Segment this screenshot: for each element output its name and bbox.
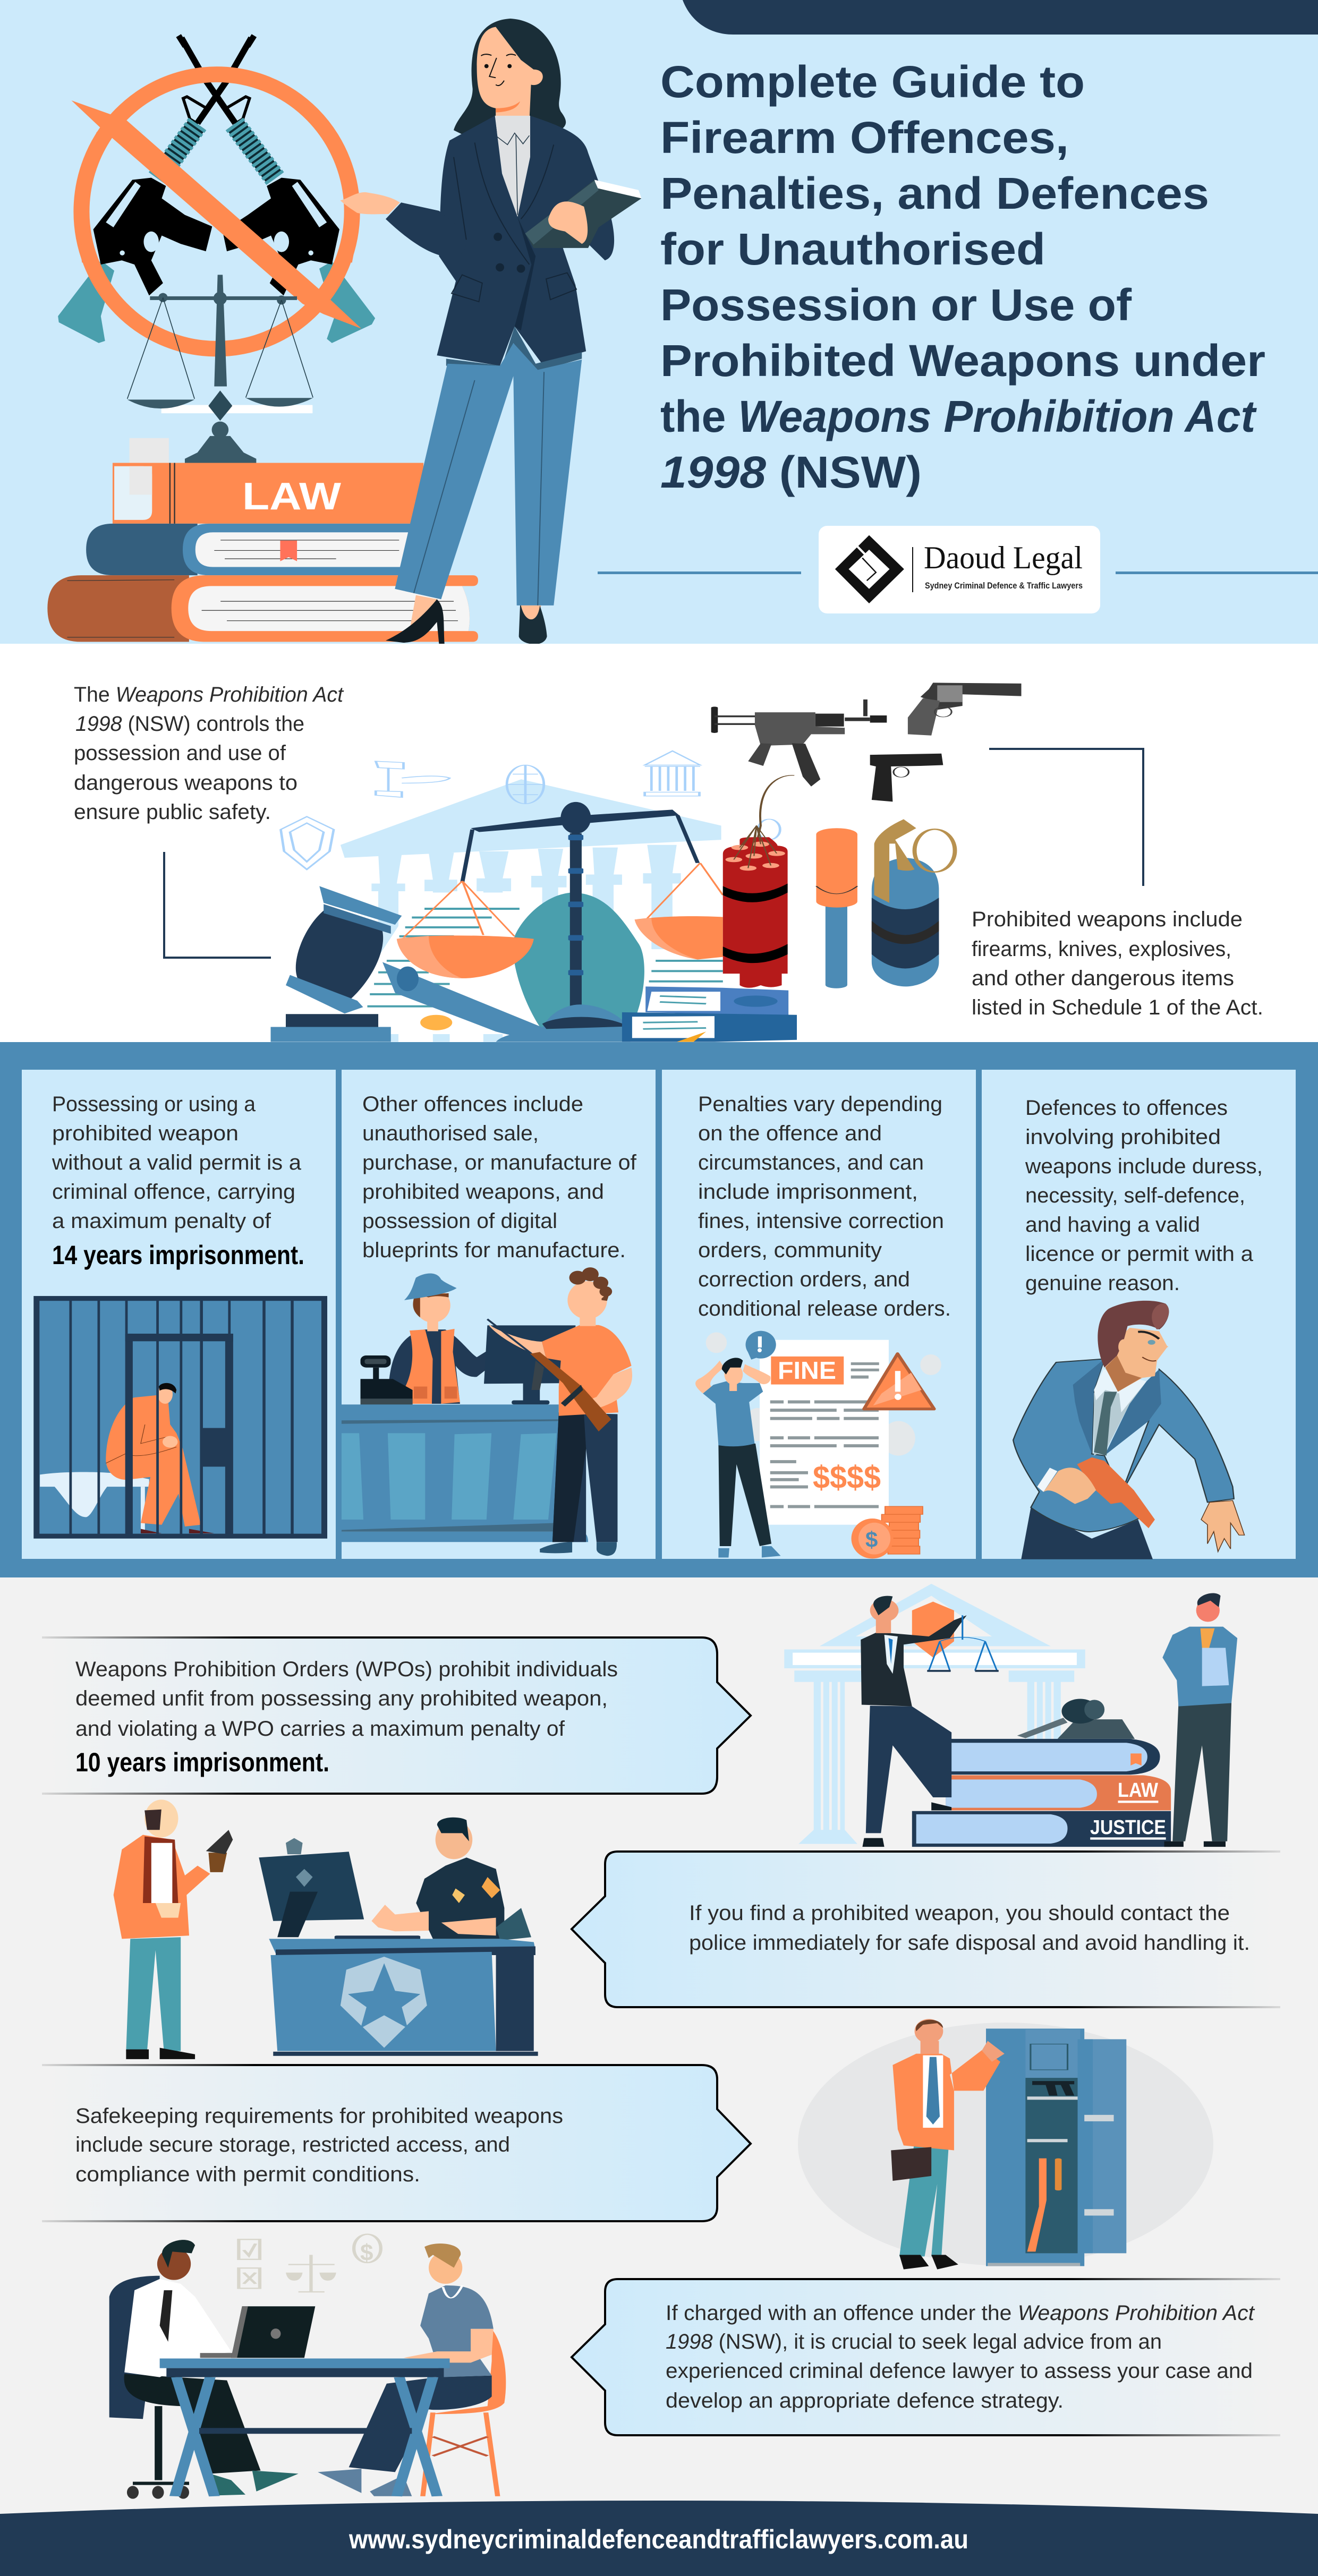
title: 1998 (NSW) (660, 447, 922, 497)
revolver (908, 683, 1021, 736)
police officer (416, 1857, 504, 1939)
illustration: man at gun safe (798, 2019, 1213, 2270)
callout 4 text: 1998 (NSW), it is crucial to seek legal advice from an (666, 2330, 1162, 2353)
callout 1 text: deemed unfit from possessing any prohibited weapon, (75, 1687, 608, 1710)
safe (986, 2028, 1084, 2266)
card 3 text (698, 1093, 951, 1320)
coin dollar: $ (865, 1527, 878, 1552)
card 3 text: conditional release orders. (698, 1297, 951, 1320)
card 4 text: genuine reason. (1025, 1272, 1180, 1295)
title: Possession or Use of (660, 280, 1132, 330)
card 2 text (362, 1093, 637, 1262)
card 4 text: Defences to offences (1025, 1096, 1228, 1120)
illustration: lawyers, temple and law books (788, 1584, 1237, 1847)
card 4 text (1025, 1096, 1263, 1295)
counter (342, 1404, 559, 1532)
gavel (296, 910, 383, 1001)
logo rule left (598, 572, 801, 574)
police badge emblem (341, 1957, 427, 2048)
bracket left (164, 852, 271, 958)
callout 1 text: and violating a WPO carries a maximum penalty of (75, 1717, 565, 1741)
fine label: FINE (778, 1357, 836, 1384)
panel: hero header (0, 0, 1318, 644)
card 2 text: prohibited weapons, and (362, 1180, 604, 1204)
dollar icon glyph: $ (360, 2240, 373, 2266)
man with gun (126, 1937, 181, 2051)
card 3 text: Penalties vary depending (698, 1093, 942, 1116)
title: the Weapons Prohibition Act (660, 391, 1257, 441)
desk (269, 1939, 535, 1954)
callout 1 text: Weapons Prohibition Orders (WPOs) prohibit individuals (75, 1658, 618, 1681)
temple (820, 1584, 1051, 1646)
illustration: client consultation at desk (109, 2234, 506, 2499)
outline icons (280, 751, 780, 869)
card 3: penalties (662, 1070, 976, 1559)
card 3 text: include imprisonment, (698, 1180, 918, 1204)
submachine gun (711, 700, 887, 787)
card 3 text: orders, community (698, 1239, 882, 1262)
knife (826, 903, 847, 988)
illustration: prohibited rifles and scales (47, 34, 478, 642)
scales (929, 1615, 997, 1670)
bracket right (989, 749, 1143, 886)
gavel (1058, 1719, 1135, 1739)
grenade (872, 858, 939, 986)
text: prohibited weapons (972, 908, 1263, 1019)
logo: Daoud Legal: Daoud Legal (924, 540, 1083, 575)
title: for Unauthorised (660, 224, 1045, 274)
monitor (484, 1325, 575, 1384)
callout 4 text: If charged with an offence under the Weapons Prohibition Act (666, 2301, 1255, 2325)
justice spine text: JUSTICE (1090, 1816, 1166, 1839)
panel: blue band with four cards (0, 1042, 1318, 1577)
callout 2 text: police immediately for safe disposal and avoid handling it. (689, 1931, 1250, 1955)
laptop (200, 2353, 235, 2358)
card 1 text: without a valid permit is a (52, 1151, 302, 1174)
dynamite bundle (756, 775, 794, 843)
callout 3 text: Safekeeping requirements for prohibited weapons (75, 2104, 563, 2128)
card 2 text: purchase, or manufacture of (362, 1151, 637, 1174)
callout 3 text (75, 2104, 563, 2186)
callout 4 text (666, 2301, 1255, 2412)
callout 4 text: develop an appropriate defence strategy. (666, 2389, 1064, 2412)
card 1 text: Possessing or using a (52, 1093, 256, 1116)
balance (471, 809, 679, 832)
top right dark tab (683, 0, 1318, 35)
title: Firearm Offences, (660, 113, 1069, 163)
ribbed handguards (158, 124, 198, 178)
callout 3 text: compliance with permit conditions. (75, 2163, 420, 2186)
text: act overview (74, 683, 344, 824)
card 3 text: fines, intensive correction (698, 1209, 944, 1233)
callout 2 text (689, 1901, 1250, 1955)
callout 1: weapons prohibition orders (42, 1637, 751, 1794)
card 2: other offences (342, 1070, 656, 1559)
decorative legal icons (239, 2234, 381, 2292)
card 3 text: on the offence and (698, 1122, 882, 1145)
illustration: reporting a weapon to police (114, 1799, 538, 2059)
text: prohibited weapons: listed in Schedule 1 of the Act. (972, 996, 1263, 1019)
temple backdrop (341, 779, 721, 1042)
text: prohibited weapons: Prohibited weapons include (972, 908, 1243, 931)
title: Prohibited Weapons under (660, 336, 1265, 386)
coins (881, 1506, 923, 1554)
left chair (109, 2276, 160, 2419)
text: act overview: 1998 (NSW) controls the (75, 712, 304, 736)
footer url: www.sydneycriminaldefenceandtrafficlawyers.com.au (348, 2524, 968, 2554)
illustration: man in suit with handgun (1013, 1301, 1245, 1559)
worried man (718, 1444, 771, 1546)
callout 4: seek legal advice (572, 2279, 1280, 2435)
title: Complete Guide to (660, 57, 1085, 107)
lawyer (124, 2374, 261, 2473)
illustration: prisoner in cell (37, 1299, 324, 1536)
callout 1 text (75, 1658, 618, 1777)
man (899, 2128, 950, 2256)
card 4 text: and having a valid (1025, 1213, 1200, 1236)
table (175, 2377, 437, 2496)
books (130, 438, 169, 494)
barrels (198, 38, 251, 123)
card 4 text: weapons include duress, (1025, 1155, 1263, 1178)
speech bubble (746, 1331, 776, 1360)
text: act overview: The Weapons Prohibition Act (74, 683, 344, 706)
callout 2: finding a prohibited weapon (572, 1852, 1280, 2007)
illustration: weapons and scales of justice (271, 683, 1021, 1042)
card 3 text: circumstances, and can (698, 1151, 924, 1174)
text: prohibited weapons: and other dangerous items (972, 967, 1234, 990)
dollar amount: $$$$ (813, 1460, 881, 1495)
callout 3 text: include secure storage, restricted access, and (75, 2133, 510, 2156)
card 1 text: prohibited weapon (52, 1122, 239, 1145)
attorney with folder (1172, 1703, 1231, 1841)
card 4 text: involving prohibited (1025, 1125, 1221, 1149)
text: act overview: ensure public safety. (74, 800, 271, 824)
logo: Daoud Legal: Sydney Criminal Defence & Traffic Lawyers (925, 581, 1083, 591)
shop clerk (387, 1329, 500, 1404)
monitor (259, 1852, 364, 1921)
text: act overview: dangerous weapons to (74, 771, 297, 795)
logo diamond mark (835, 535, 904, 603)
callout 3: safekeeping requirements (42, 2065, 751, 2221)
law spine text: LAW (1118, 1779, 1158, 1802)
book label: LAW (242, 475, 341, 518)
card 1: possessing a prohibited weapon (22, 1070, 336, 1559)
callout 2 text: If you find a prohibited weapon, you should contact the (689, 1901, 1230, 1925)
panel: introduction on white (0, 644, 1318, 1042)
logo rule right (1116, 572, 1318, 574)
right chair (429, 2329, 506, 2414)
pistol (870, 754, 943, 801)
logo: Daoud Legal (819, 526, 1100, 613)
warning triangle (864, 1354, 934, 1409)
cash register (361, 1355, 390, 1368)
lawyer with foot on books (866, 1705, 951, 1833)
callout 1 text: 10 years imprisonment. (75, 1747, 329, 1777)
books (933, 1739, 1160, 1775)
card 1 text: criminal offence, carrying (52, 1180, 295, 1204)
paper sheets (361, 892, 538, 1034)
card 1 text: 14 years imprisonment. (52, 1240, 304, 1270)
text: prohibited weapons: firearms, knives, explosives, (972, 937, 1231, 961)
footer band (0, 2501, 1318, 2576)
card 1 text (52, 1093, 304, 1270)
illustration: gun shop counter (342, 1267, 632, 1556)
illustration: lawyer woman (341, 19, 642, 644)
panel: callouts section (0, 1584, 1318, 2576)
card 2 text: Other offences include (362, 1093, 583, 1116)
rifle bodies (93, 178, 212, 295)
card 2 text: possession of digital (362, 1209, 557, 1233)
customer (552, 1412, 617, 1542)
title: Penalties, and Defences (660, 168, 1209, 218)
text: act overview: possession and use of (74, 741, 286, 765)
rifle (487, 1319, 531, 1354)
illustration: fine document and worried man (695, 1331, 941, 1558)
card 1 text: a maximum penalty of (52, 1209, 271, 1233)
folders (645, 986, 788, 1016)
card 4: defences (982, 1070, 1296, 1559)
card 4 text: licence or permit with a (1025, 1242, 1254, 1266)
callout 4 text: experienced criminal defence lawyer to assess your case and (666, 2359, 1253, 2383)
title (660, 57, 1265, 497)
teal mound (513, 892, 644, 1034)
client (349, 2376, 492, 2472)
card 2 text: blueprints for manufacture. (362, 1239, 626, 1262)
prohibition ring (81, 74, 352, 349)
card 2 text: unauthorised sale, (362, 1122, 539, 1145)
card 4 text: necessity, self-defence, (1025, 1184, 1245, 1207)
card 3 text: correction orders, and (698, 1268, 910, 1291)
